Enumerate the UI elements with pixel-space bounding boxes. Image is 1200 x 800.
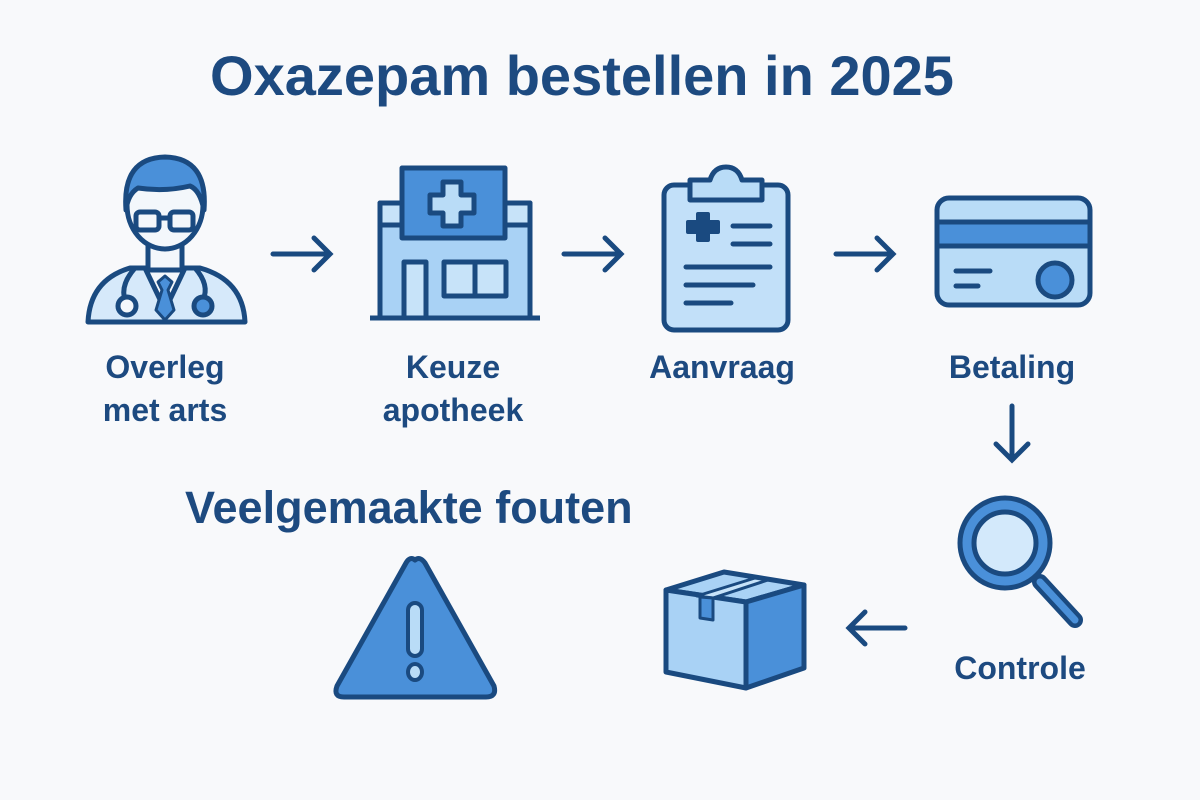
- label: Betaling: Betaling: [949, 349, 1075, 385]
- label: Keuze apotheek: Keuze: [406, 349, 500, 385]
- icon: box: [666, 572, 804, 688]
- heading: Veelgemaakte fouten: Veelgemaakte fouten: [185, 482, 633, 533]
- icon: warning: [336, 559, 495, 697]
- icon: card: [937, 198, 1090, 305]
- label: Overleg met arts: met arts: [103, 392, 227, 428]
- arrow left: [849, 612, 905, 644]
- icon: doctor: [88, 157, 245, 322]
- label: Aanvraag: Aanvraag: [649, 349, 795, 385]
- label: Keuze apotheek: apotheek: [383, 392, 523, 428]
- arrow 2: [564, 238, 621, 270]
- arrow 1: [273, 238, 330, 270]
- arrow down: [996, 406, 1028, 460]
- label: Controle: Controle: [954, 650, 1086, 686]
- icon: magnifier: [960, 498, 1075, 620]
- arrow 3: [836, 238, 893, 270]
- label: Overleg met arts: Overleg: [105, 349, 225, 385]
- icon: clipboard: [664, 167, 788, 330]
- icon: pharmacy: [370, 168, 540, 318]
- title: Oxazepam bestellen in 2025: [210, 44, 954, 107]
